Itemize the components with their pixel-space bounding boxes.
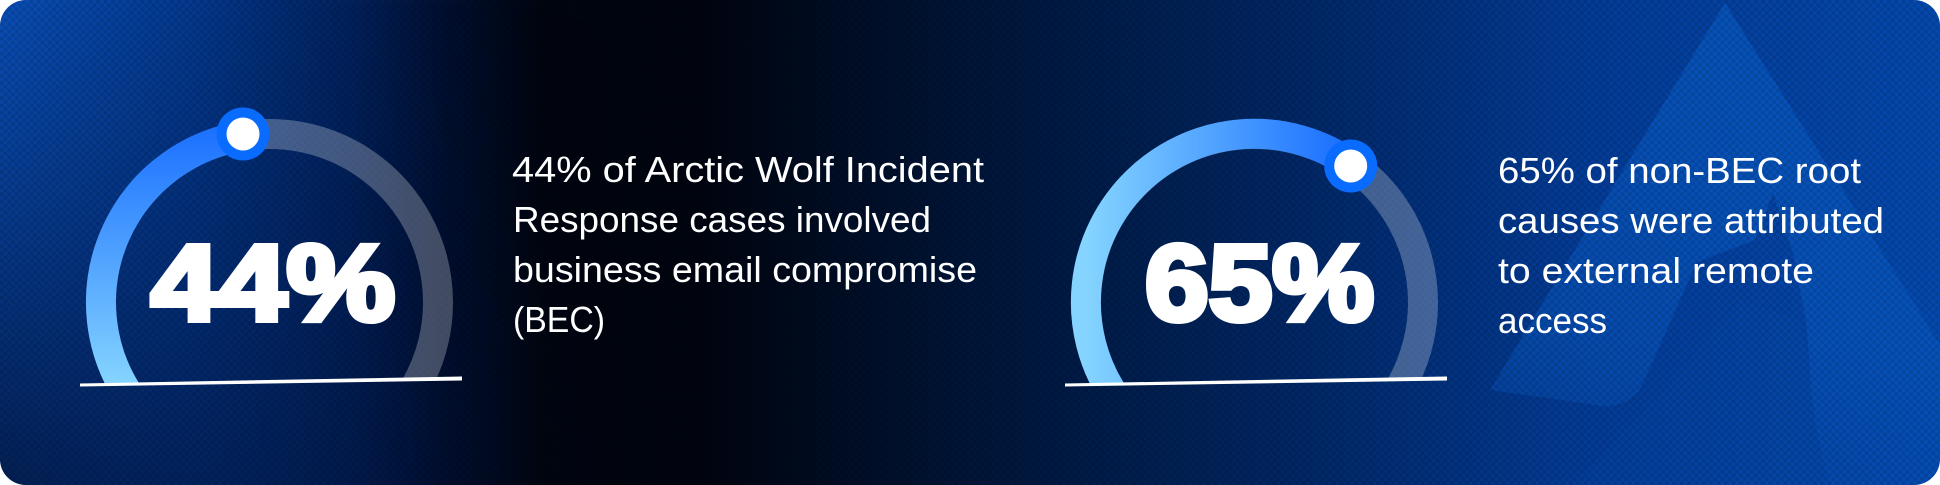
icon: Arctic Wolf watermark logo (1490, 3, 1940, 485)
text block: 65% description: access (1498, 300, 1607, 341)
big number: 44%: 44% (151, 222, 395, 343)
text block: 44% description: 44% of Arctic Wolf Incident (512, 149, 984, 190)
text block: 44% description: business email compromise (513, 249, 977, 290)
gauge knob (1324, 140, 1377, 192)
gauge baseline (80, 376, 462, 386)
gauge: 65% (1065, 134, 1447, 395)
text block: 44% description: (BEC) (513, 299, 605, 340)
gauge baseline (1065, 376, 1447, 386)
text block: 65% description: causes were attributed (1498, 200, 1884, 241)
gauge progress arc (1086, 134, 1351, 395)
gauge progress arc (101, 136, 243, 395)
text block: 65% description: to external remote (1498, 250, 1814, 291)
gauge knob (216, 108, 270, 160)
gauge track (101, 134, 438, 395)
text block: 44% description: Response cases involved (513, 199, 931, 240)
gauge track (1086, 134, 1423, 395)
text block: 65% description: 65% of non-BEC root (1498, 150, 1861, 191)
big number: 65%: 65% (1145, 222, 1374, 343)
text block: 44% description (512, 149, 984, 340)
text block: 65% description (1498, 150, 1884, 341)
gauge: 44% (80, 108, 462, 395)
